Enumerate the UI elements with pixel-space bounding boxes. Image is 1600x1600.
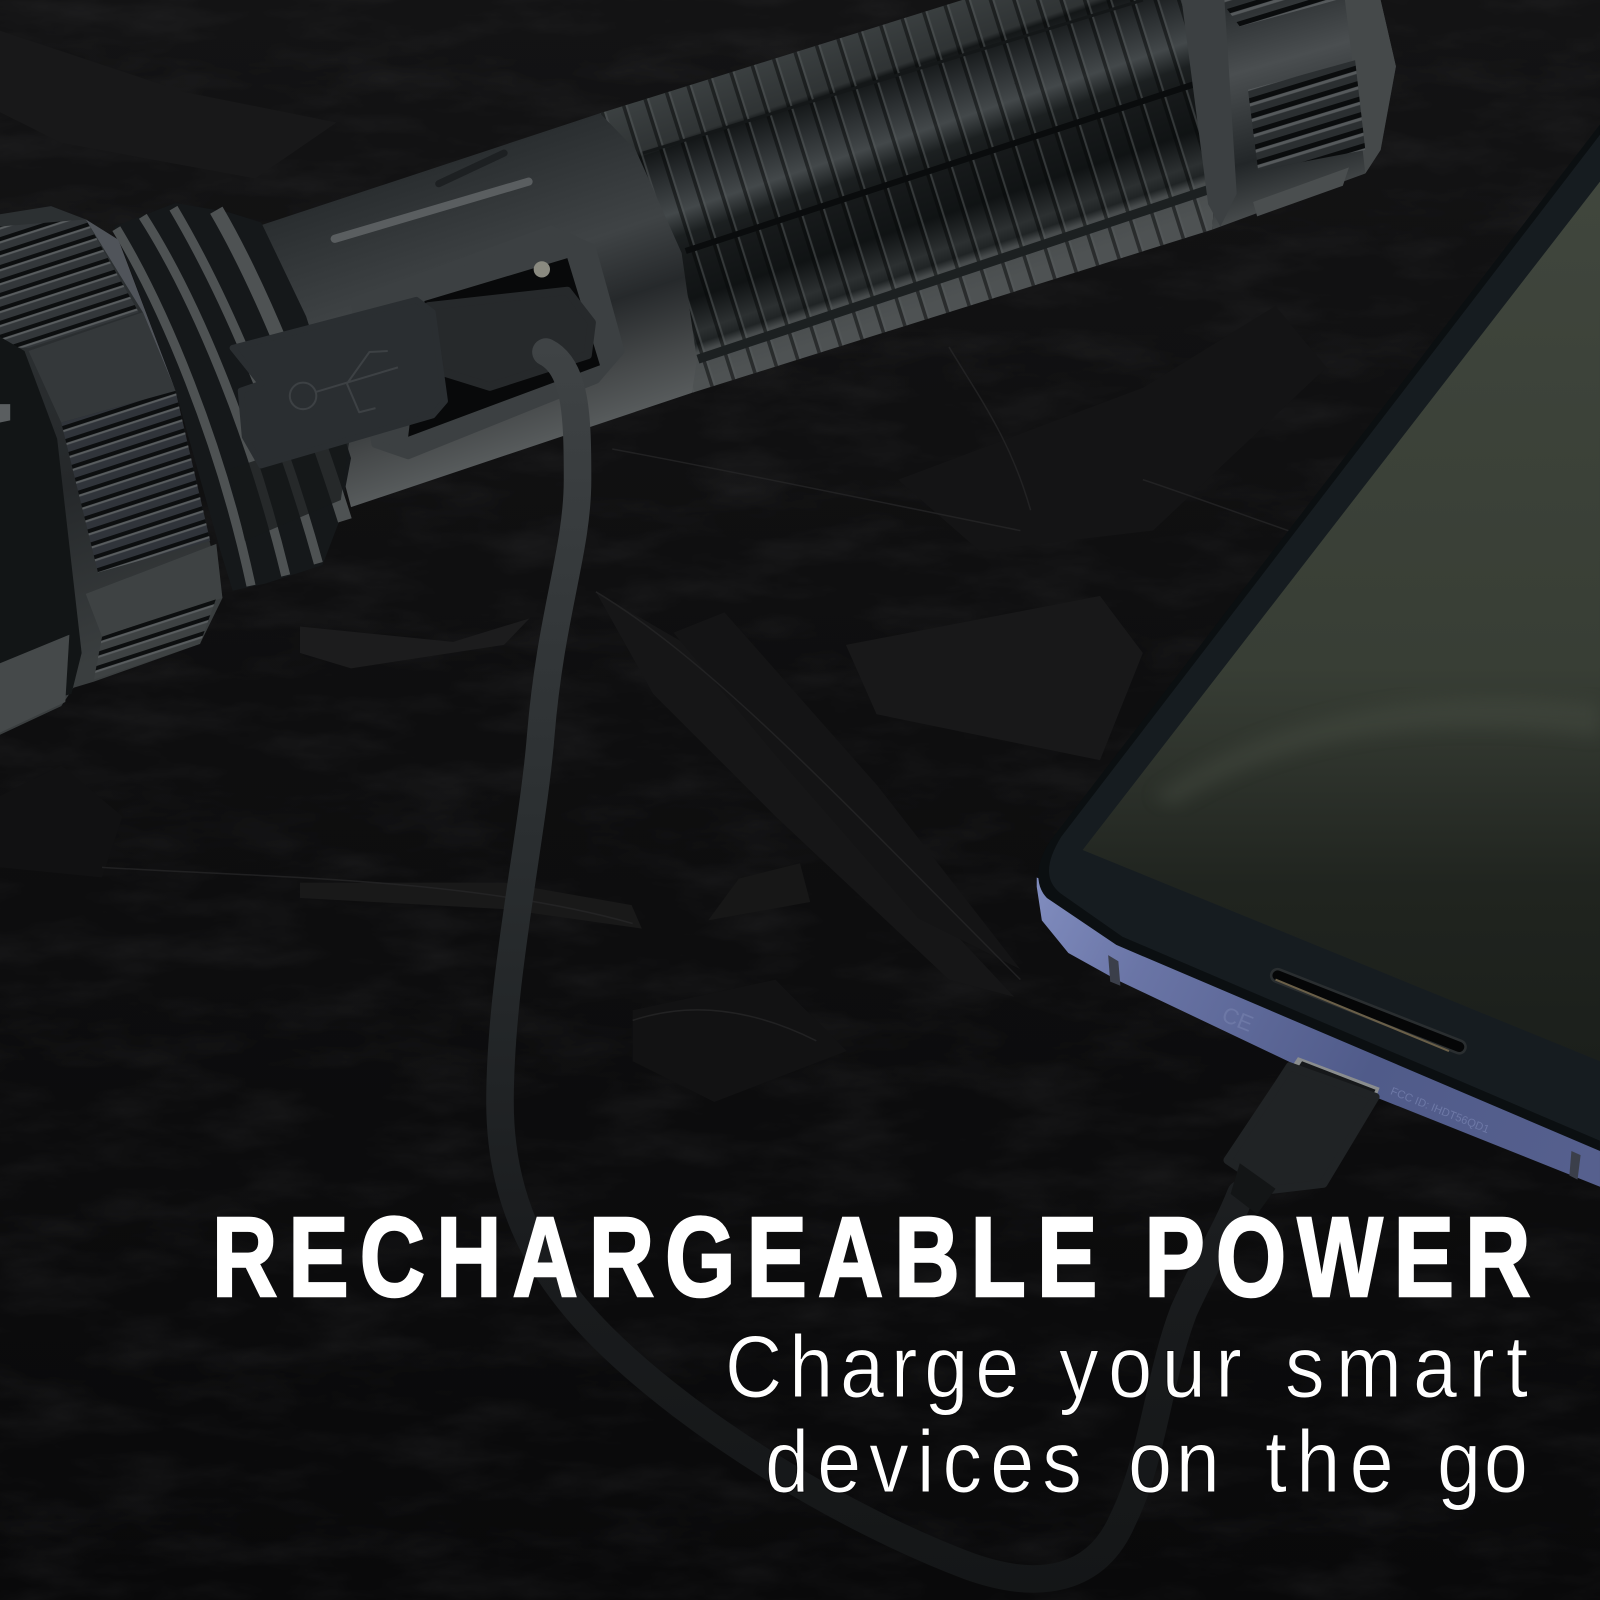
subtitle: devices [765, 1412, 1082, 1511]
earpiece speaker [1276, 976, 1459, 1051]
regulatory markings [1219, 1002, 1491, 1136]
charging cable [500, 352, 1241, 1579]
USB-C connector [1228, 1057, 1380, 1214]
regulatory markings: CE [1219, 1002, 1257, 1037]
subtitle: go [1437, 1412, 1528, 1511]
phone bezel [1049, 135, 1600, 1141]
title: RECHARGEABLE POWER [212, 1193, 1530, 1320]
phone blue edge [1037, 878, 1600, 1187]
subtitle: your [1059, 1317, 1242, 1416]
tube slots [335, 153, 529, 239]
subtitle [725, 1317, 1528, 1511]
USB plug [429, 291, 592, 387]
rubber USB cap [233, 300, 445, 465]
subtitle: on [1128, 1412, 1220, 1511]
flashlight head [0, 206, 222, 735]
screen reflection [1153, 698, 1600, 806]
subtitle: the [1265, 1412, 1394, 1511]
regulatory markings: FCC ID: IHDT56QD1 [1389, 1086, 1491, 1136]
phone screen [1083, 182, 1600, 1061]
subtitle: smart [1285, 1317, 1528, 1416]
tail cap [1182, 0, 1396, 230]
phone glass front [1038, 124, 1600, 1151]
cooling fins [114, 203, 351, 591]
subtitle: Charge [725, 1317, 1019, 1416]
ribbed grip [600, 0, 1214, 393]
charging port frame [355, 230, 620, 455]
smartphone [1037, 124, 1600, 1214]
phone seam marks [1108, 955, 1581, 1180]
flashlight tube body [257, 79, 714, 507]
